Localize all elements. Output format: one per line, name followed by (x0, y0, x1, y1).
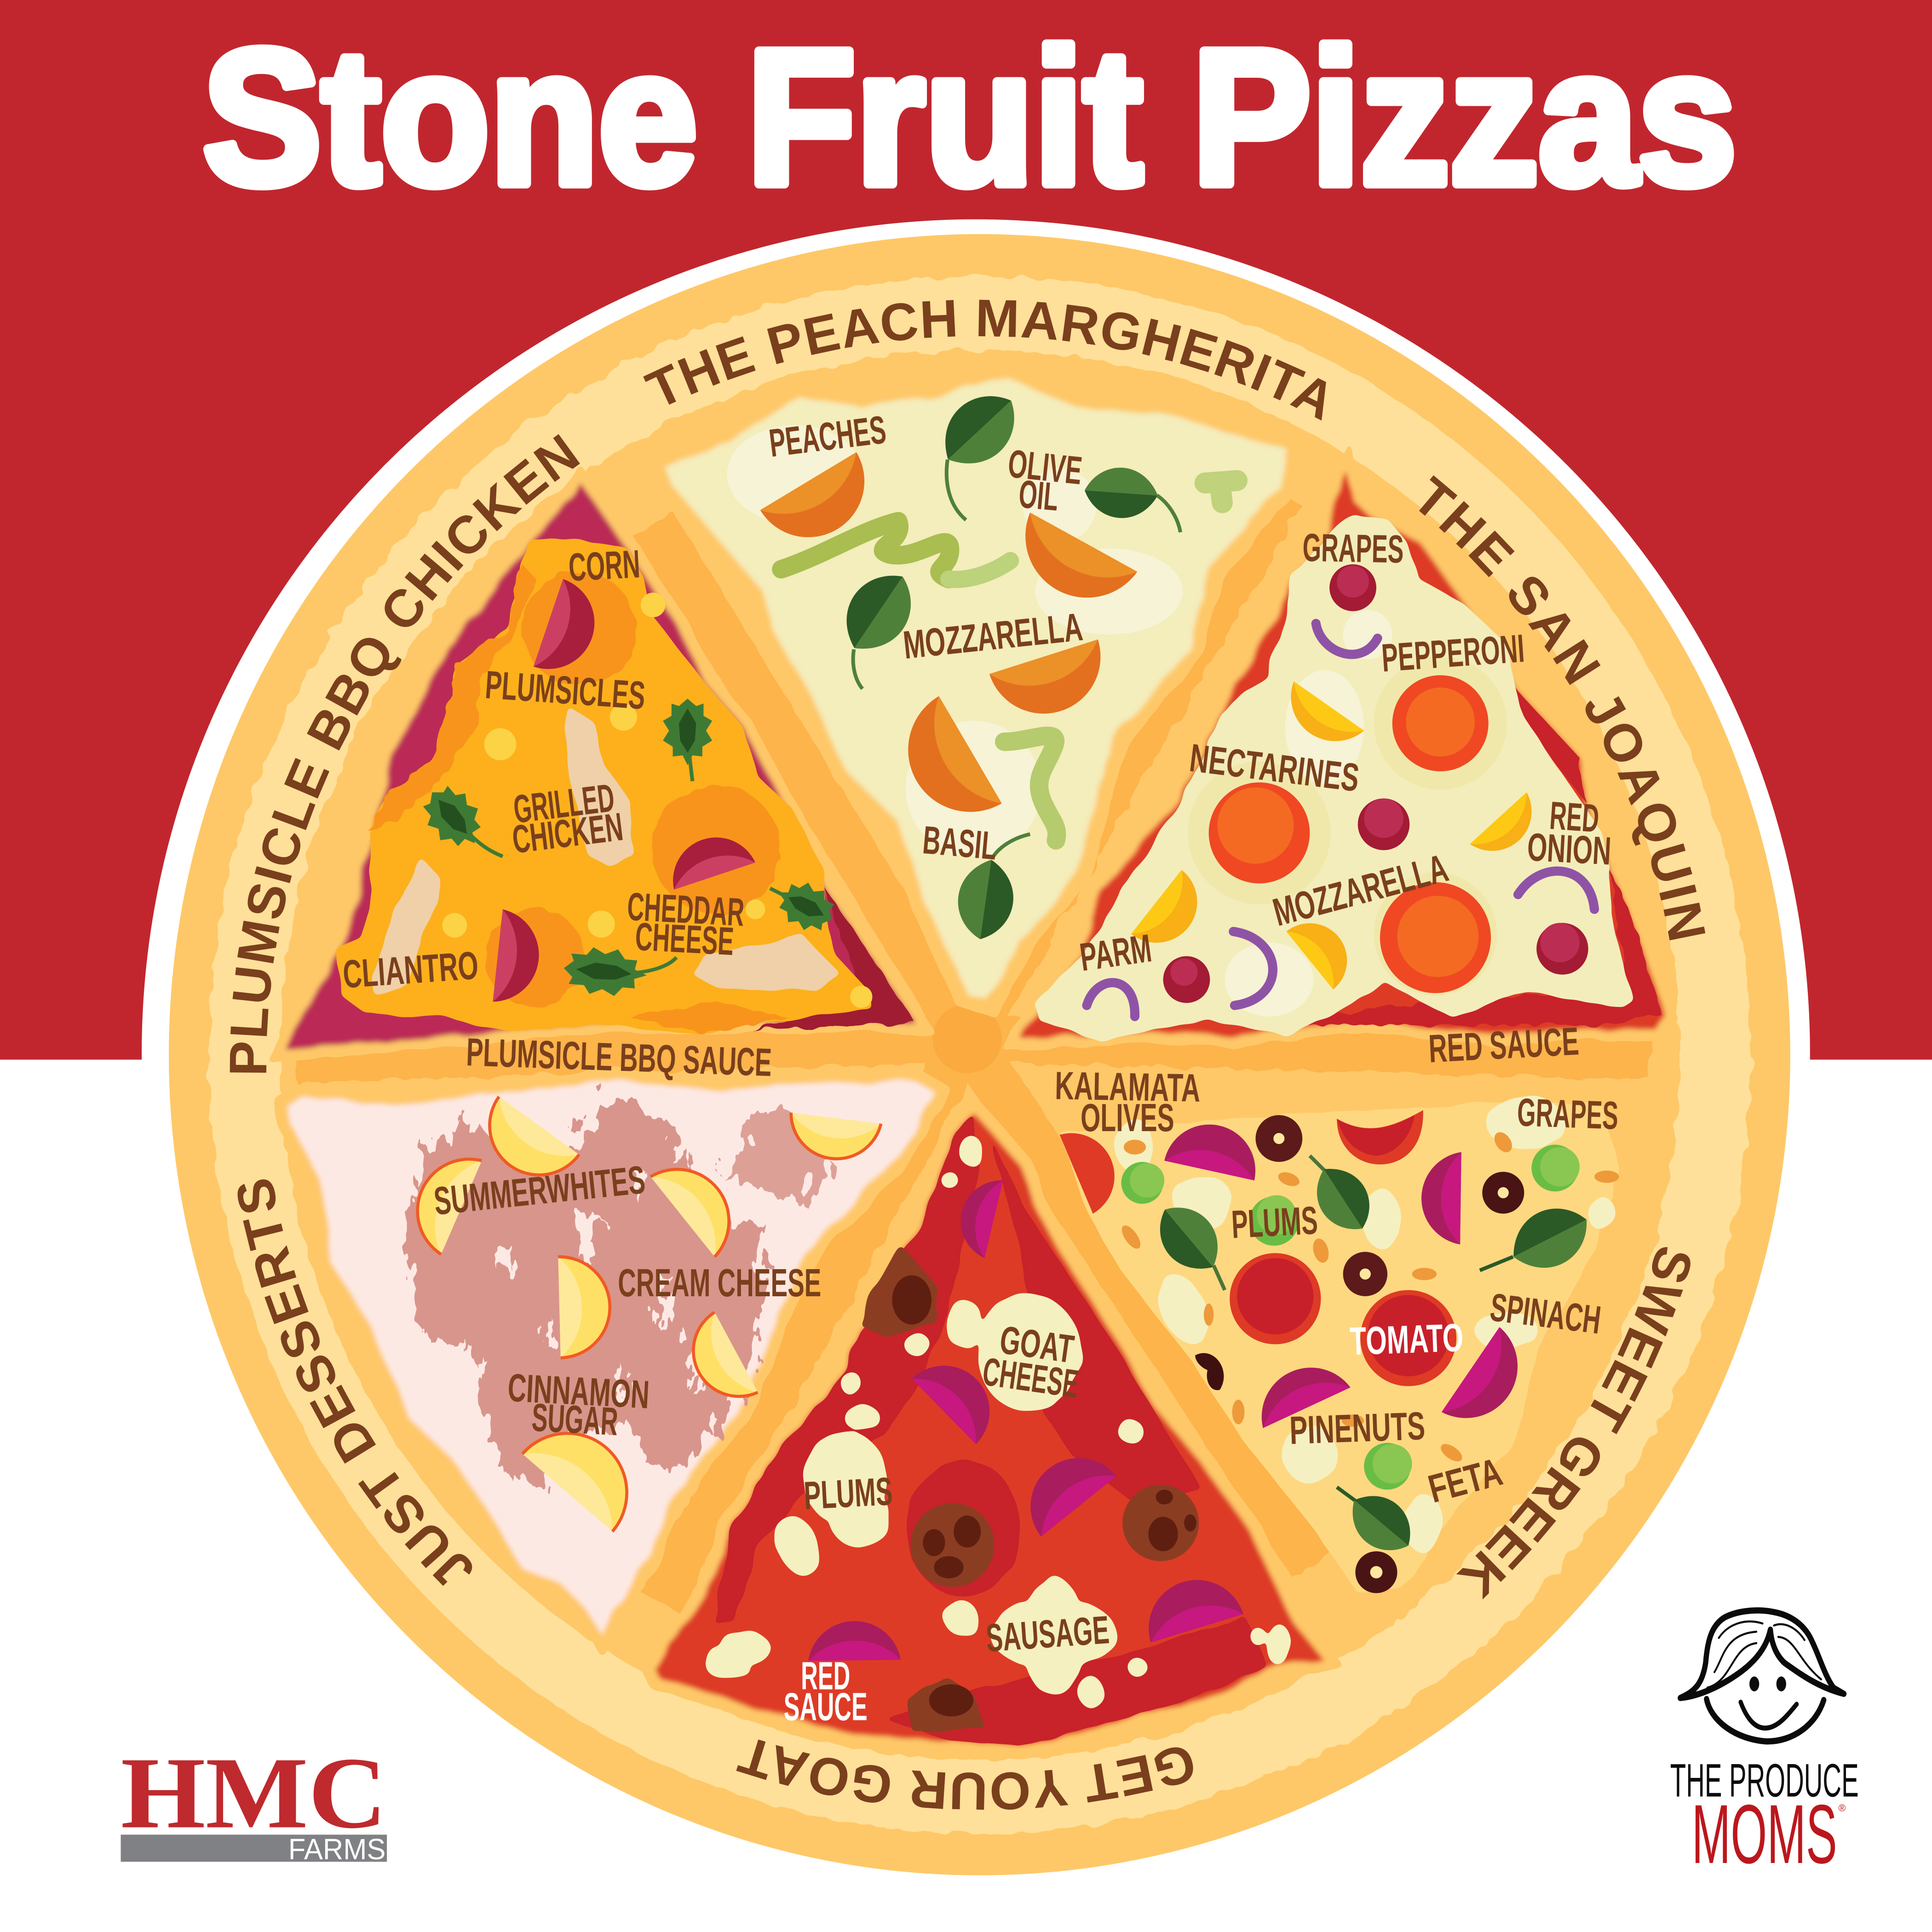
labels: peach margherita: OIL (1017, 472, 1060, 519)
name: just desserts: JUST DESSERTS (224, 1172, 485, 1601)
labels: sweet greek: TOMATO (1349, 1316, 1464, 1363)
pizza crust (169, 234, 1790, 1875)
label: plumsicle bbq sauce: PLUMSICLE BBQ SAUCE (466, 1030, 772, 1085)
plum slices (1164, 1125, 1518, 1428)
slice: the peach margherita (664, 377, 1288, 1000)
labels: bbq chicken (341, 542, 745, 997)
olive oil drizzle (781, 481, 1237, 840)
labels: get your goat: PLUMS (803, 1469, 894, 1518)
darker sauce corner (752, 887, 915, 1030)
slice base: mozzarella (664, 377, 1288, 1000)
pale sauce base (1060, 1100, 1620, 1592)
white plate (142, 219, 1810, 1888)
labels: san joaquin: NECTARINES (1187, 736, 1362, 800)
labels: san joaquin: PEPPERONI (1380, 626, 1526, 680)
labels: get your goat: SAUSAGE (984, 1608, 1110, 1661)
slice: sweet greek (1055, 1064, 1620, 1593)
name: the peach margherita: THE PEACH MARGHERITA (638, 289, 1345, 432)
grapes (1163, 564, 1588, 1003)
labels: bbq chicken: GRILLED (511, 776, 617, 832)
red sauce base (1020, 472, 1666, 1039)
goat cheese (705, 1136, 1291, 1708)
curved pizza names (219, 289, 1717, 1821)
orange cheddar layer (335, 537, 871, 1034)
darker cheddar patches (368, 563, 788, 1034)
name: get your goat: GET YOUR GOAT (731, 1725, 1202, 1821)
labels: bbq chicken: CHICKEN (510, 805, 625, 862)
labels: get your goat: CHEESE (980, 1349, 1081, 1406)
labels: get your goat: SAUCE (784, 1685, 868, 1729)
labels: peach margherita: PEACHES (767, 408, 888, 466)
logo: hmc farms: HMC (121, 1736, 387, 1850)
labels: bbq chicken: CHEESE (634, 914, 735, 964)
labels: sweet greek (1055, 1064, 1619, 1512)
labels: san joaquin (1077, 526, 1612, 1071)
cheese layer (1034, 515, 1633, 1041)
labels: just desserts: SUGAR (531, 1395, 619, 1444)
light cheese patches (727, 425, 1183, 857)
plum slices (808, 1180, 1243, 1661)
labels: peach margherita: BASIL (921, 818, 999, 868)
slice: get your goat (654, 1113, 1323, 1747)
name: the san joaquin: THE SAN JOAQUIN (1402, 466, 1717, 949)
name: plumsicle bbq chicken: PLUMSICLE BBQ CHICKEN (219, 422, 591, 1076)
name: sweet greek: SWEET GREEK (1448, 1240, 1704, 1609)
labels: san joaquin: RED (1548, 794, 1600, 841)
slice: just desserts (287, 1081, 935, 1634)
labels: just desserts: CINNAMON (506, 1366, 650, 1417)
labels: san joaquin: GRAPES (1302, 526, 1404, 571)
labels: peach margherita: OLIVE (1006, 442, 1084, 493)
slice: the san joaquin (1020, 472, 1666, 1071)
labels: just desserts: CREAM CHEESE (618, 1261, 821, 1305)
cinnamon sugar (408, 1093, 830, 1489)
feta crumbles (1116, 1095, 1616, 1552)
labels: bbq chicken: CLIANTRO (341, 943, 480, 997)
cream cheese base (287, 1081, 935, 1634)
labels: just desserts (432, 1157, 821, 1444)
logo: hmc farms: FARMS (288, 1833, 385, 1866)
kalamata olives (1195, 1115, 1524, 1593)
labels: bbq chicken: CORN (568, 542, 641, 590)
darker sauce on right and bottom (1232, 605, 1663, 1025)
spinach leaves (1145, 1156, 1599, 1564)
pepperoni (1209, 675, 1491, 993)
labels: peach margherita: MOZZARELLA (901, 605, 1085, 667)
labels: sweet greek: KALAMATA (1055, 1064, 1201, 1110)
labels: bbq chicken: CHEDDAR (626, 885, 745, 935)
red onion (1087, 623, 1594, 1017)
basil leaves (830, 379, 1180, 943)
labels: san joaquin: PARM (1077, 926, 1154, 980)
labels: get your goat: RED (801, 1654, 850, 1698)
plum slices (493, 579, 755, 1002)
tomato slices (1060, 1110, 1456, 1386)
labels: get your goat (784, 1317, 1110, 1729)
summerwhite peach slices (418, 1097, 881, 1531)
sausage (862, 1251, 1199, 1731)
nectarines (1131, 681, 1532, 989)
labels: san joaquin: RED SAUCE (1427, 1019, 1580, 1071)
corn (443, 592, 872, 1008)
title: Stone Fruit Pizzas (203, 10, 1736, 224)
plumsicle sauce base (286, 484, 915, 1050)
labels: sweet greek: SPINACH (1488, 1285, 1603, 1342)
labels: sweet greek: PINENUTS (1289, 1404, 1426, 1453)
grapes (1121, 1144, 1580, 1489)
labels: san joaquin: ONION (1526, 825, 1612, 874)
logo: the produce moms (1670, 1610, 1859, 1881)
red sauce base (654, 1113, 1323, 1747)
labels: get your goat: GOAT (997, 1317, 1076, 1372)
peach slices (760, 452, 1137, 812)
labels: sweet greek: GRAPES (1517, 1090, 1619, 1138)
cheese halos (1188, 657, 1507, 995)
labels: sweet greek: FETA (1424, 1449, 1506, 1512)
slice: plumsicle bbq chicken (286, 484, 915, 1050)
light cheese patches (1225, 610, 1392, 1017)
labels: bbq chicken: PLUMSICLES (484, 663, 647, 718)
labels: sweet greek: PLUMS (1230, 1198, 1319, 1247)
pine nuts (1118, 1129, 1619, 1465)
labels: peach margherita (767, 408, 1085, 868)
labels: san joaquin: MOZZARELLA (1269, 846, 1453, 935)
cilantro (413, 699, 842, 999)
icon: smiling face (1680, 1610, 1844, 1742)
red background band (0, 0, 1932, 1060)
logo: the produce moms: ® (1839, 1802, 1846, 1813)
darker sauce patches (715, 1113, 1269, 1747)
grilled chicken (374, 706, 838, 997)
labels: just desserts: SUMMERWHITES (432, 1157, 647, 1224)
labels: sweet greek: OLIVES (1081, 1096, 1174, 1140)
